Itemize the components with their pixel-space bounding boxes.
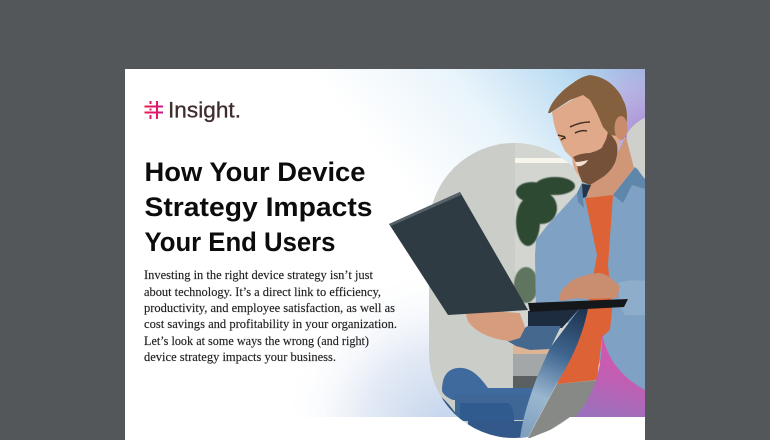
person (389, 75, 645, 438)
title (144, 157, 372, 257)
open shirt panel (520, 308, 588, 438)
hand holding laptop (466, 312, 525, 341)
collar (577, 167, 645, 208)
title: Your End Users (144, 227, 336, 257)
ear (614, 116, 628, 140)
eyes and brows (558, 122, 590, 140)
typing hand (559, 273, 620, 301)
icon: Insight mark (144, 101, 163, 119)
neck (587, 137, 634, 198)
jeans (528, 380, 600, 438)
right sleeve (618, 280, 645, 315)
shirt cuff (507, 326, 561, 350)
head (548, 75, 628, 185)
dark sleeve underside (528, 309, 579, 328)
laptop base (528, 299, 628, 312)
office plant (514, 177, 575, 303)
title: Strategy Impacts (144, 192, 372, 222)
smile (575, 160, 588, 166)
beard (573, 132, 617, 185)
logo: Insight (144, 98, 241, 122)
face (552, 92, 620, 185)
blue armchairs (441, 368, 533, 438)
intro paragraph (144, 267, 397, 364)
intro paragraph: productivity, and employee satisfaction, as well as (144, 300, 395, 315)
accent: pink wave (575, 333, 645, 417)
intro paragraph: Investing in the right device strategy isn’t just (144, 267, 373, 282)
photo: office background in capsule (429, 143, 599, 439)
gradient backdrop (125, 69, 645, 417)
title: How Your Device (144, 157, 366, 187)
intro paragraph: about technology. It’s a direct link to efficiency, (144, 284, 381, 299)
intro paragraph: device strategy impacts your business. (144, 349, 336, 364)
shirt main (535, 168, 645, 405)
intro paragraph: cost savings and profitability in your organization. (144, 316, 397, 331)
hair (548, 75, 627, 137)
intro paragraph: Let’s look at some ways the wrong (and right) (144, 333, 369, 348)
panel: white report cover (125, 69, 645, 440)
shape: right grey arch (627, 118, 645, 178)
wordmark: Insight. (168, 98, 241, 122)
laptop lid (389, 192, 528, 315)
orange t-shirt (557, 195, 613, 384)
